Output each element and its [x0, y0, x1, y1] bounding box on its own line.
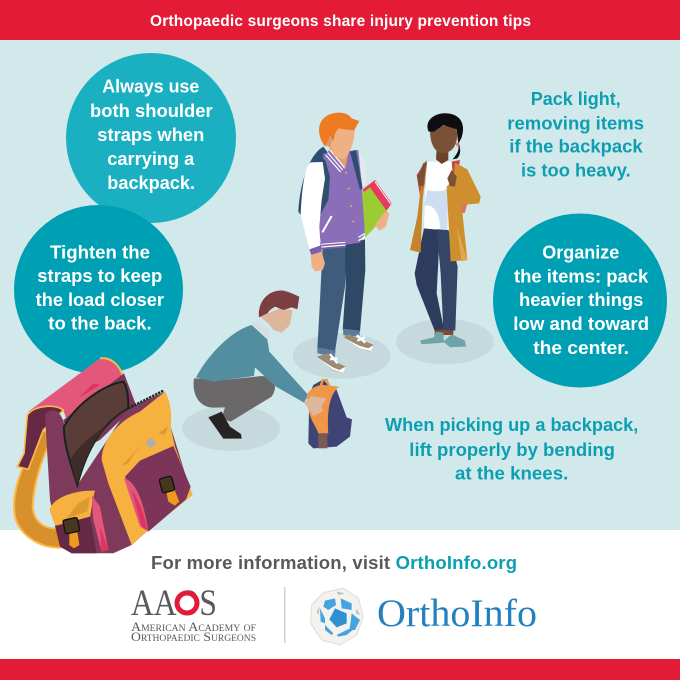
tip text: pack light — [507, 89, 644, 181]
tip circle: shoulder straps — [66, 53, 236, 223]
tip text: pack light: removing items — [507, 113, 644, 133]
logo: AAOS — [131, 583, 256, 644]
footer: more information line: For more information, visit OrthoInfo.org — [151, 552, 517, 573]
tip circle: organize items: low and toward — [513, 314, 649, 334]
tip circle: shoulder straps: Always use — [102, 77, 199, 97]
tip circle: shoulder straps: both shoulder — [90, 101, 213, 121]
divider between logos — [284, 587, 286, 643]
logo: OrthoInfo wordmark: OrthoInfo — [377, 592, 537, 635]
illustration: crouching man with small backpack — [182, 291, 352, 451]
tip circle: tighten straps: Tighten the — [50, 242, 150, 262]
tip circle: tighten straps: to the back. — [48, 314, 152, 334]
tip circle: tighten straps: straps to keep — [37, 266, 162, 286]
tip text: lift properly: at the knees. — [455, 463, 568, 483]
top banner — [0, 0, 680, 40]
logo: AAOS: AAOS — [131, 583, 217, 624]
tip circle: organize items: the items: pack — [514, 266, 649, 286]
illustration: large open backpack — [14, 358, 193, 553]
logo: OrthoInfo ball icon — [311, 588, 363, 645]
tip text: lift properly: lift properly by bending — [409, 440, 615, 460]
panel: light blue background — [0, 40, 680, 530]
tip circle: organize items: the center. — [533, 338, 629, 358]
tip circle: shoulder straps: carrying a — [107, 149, 195, 169]
tip text: lift properly — [385, 415, 638, 483]
tip circle: shoulder straps: backpack. — [107, 173, 195, 193]
tip text: pack light: is too heavy. — [521, 161, 631, 181]
tip circle: organize items: Organize — [542, 242, 619, 262]
tip text: pack light: if the backpack — [509, 137, 644, 157]
tip circle: tighten straps — [14, 205, 183, 374]
tip circle: tighten straps: the load closer — [36, 290, 164, 310]
logo: AAOS: American Academy of — [131, 619, 256, 634]
illustration: standing man — [293, 113, 392, 379]
logo: AAOS: Orthopaedic Surgeons — [131, 629, 256, 644]
tip circle: organize items — [493, 214, 667, 388]
illustration: standing woman — [396, 113, 494, 364]
tip circle: organize items: heavier things — [519, 290, 643, 310]
title: Orthopaedic surgeons share injury prevention tips — [150, 13, 531, 30]
tip text: lift properly: When picking up a backpack, — [385, 415, 638, 435]
tip text: pack light: Pack light, — [531, 89, 621, 109]
tip circle: shoulder straps: straps when — [97, 125, 204, 145]
bottom red band — [0, 659, 680, 680]
